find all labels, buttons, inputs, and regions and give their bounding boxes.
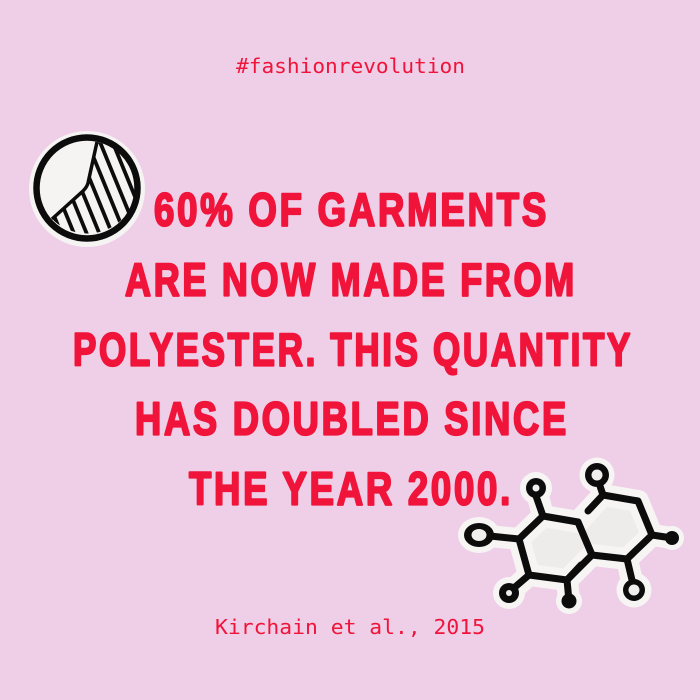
sticker backing — [458, 458, 684, 614]
icon: pie chart sticker — [29, 131, 145, 247]
headline: HAS DOUBLED SINCE — [135, 392, 569, 444]
icon: molecule sticker — [458, 458, 684, 614]
headline — [73, 184, 633, 514]
hashtag: #fashionrevolution — [236, 54, 465, 78]
headline: 60% OF GARMENTS — [154, 184, 549, 236]
citation: Kirchain et al., 2015 — [215, 615, 485, 639]
bonds — [490, 486, 672, 601]
atoms — [464, 463, 679, 608]
headline: ARE NOW MADE FROM — [125, 254, 577, 306]
headline: THE YEAR 2000. — [189, 462, 513, 514]
